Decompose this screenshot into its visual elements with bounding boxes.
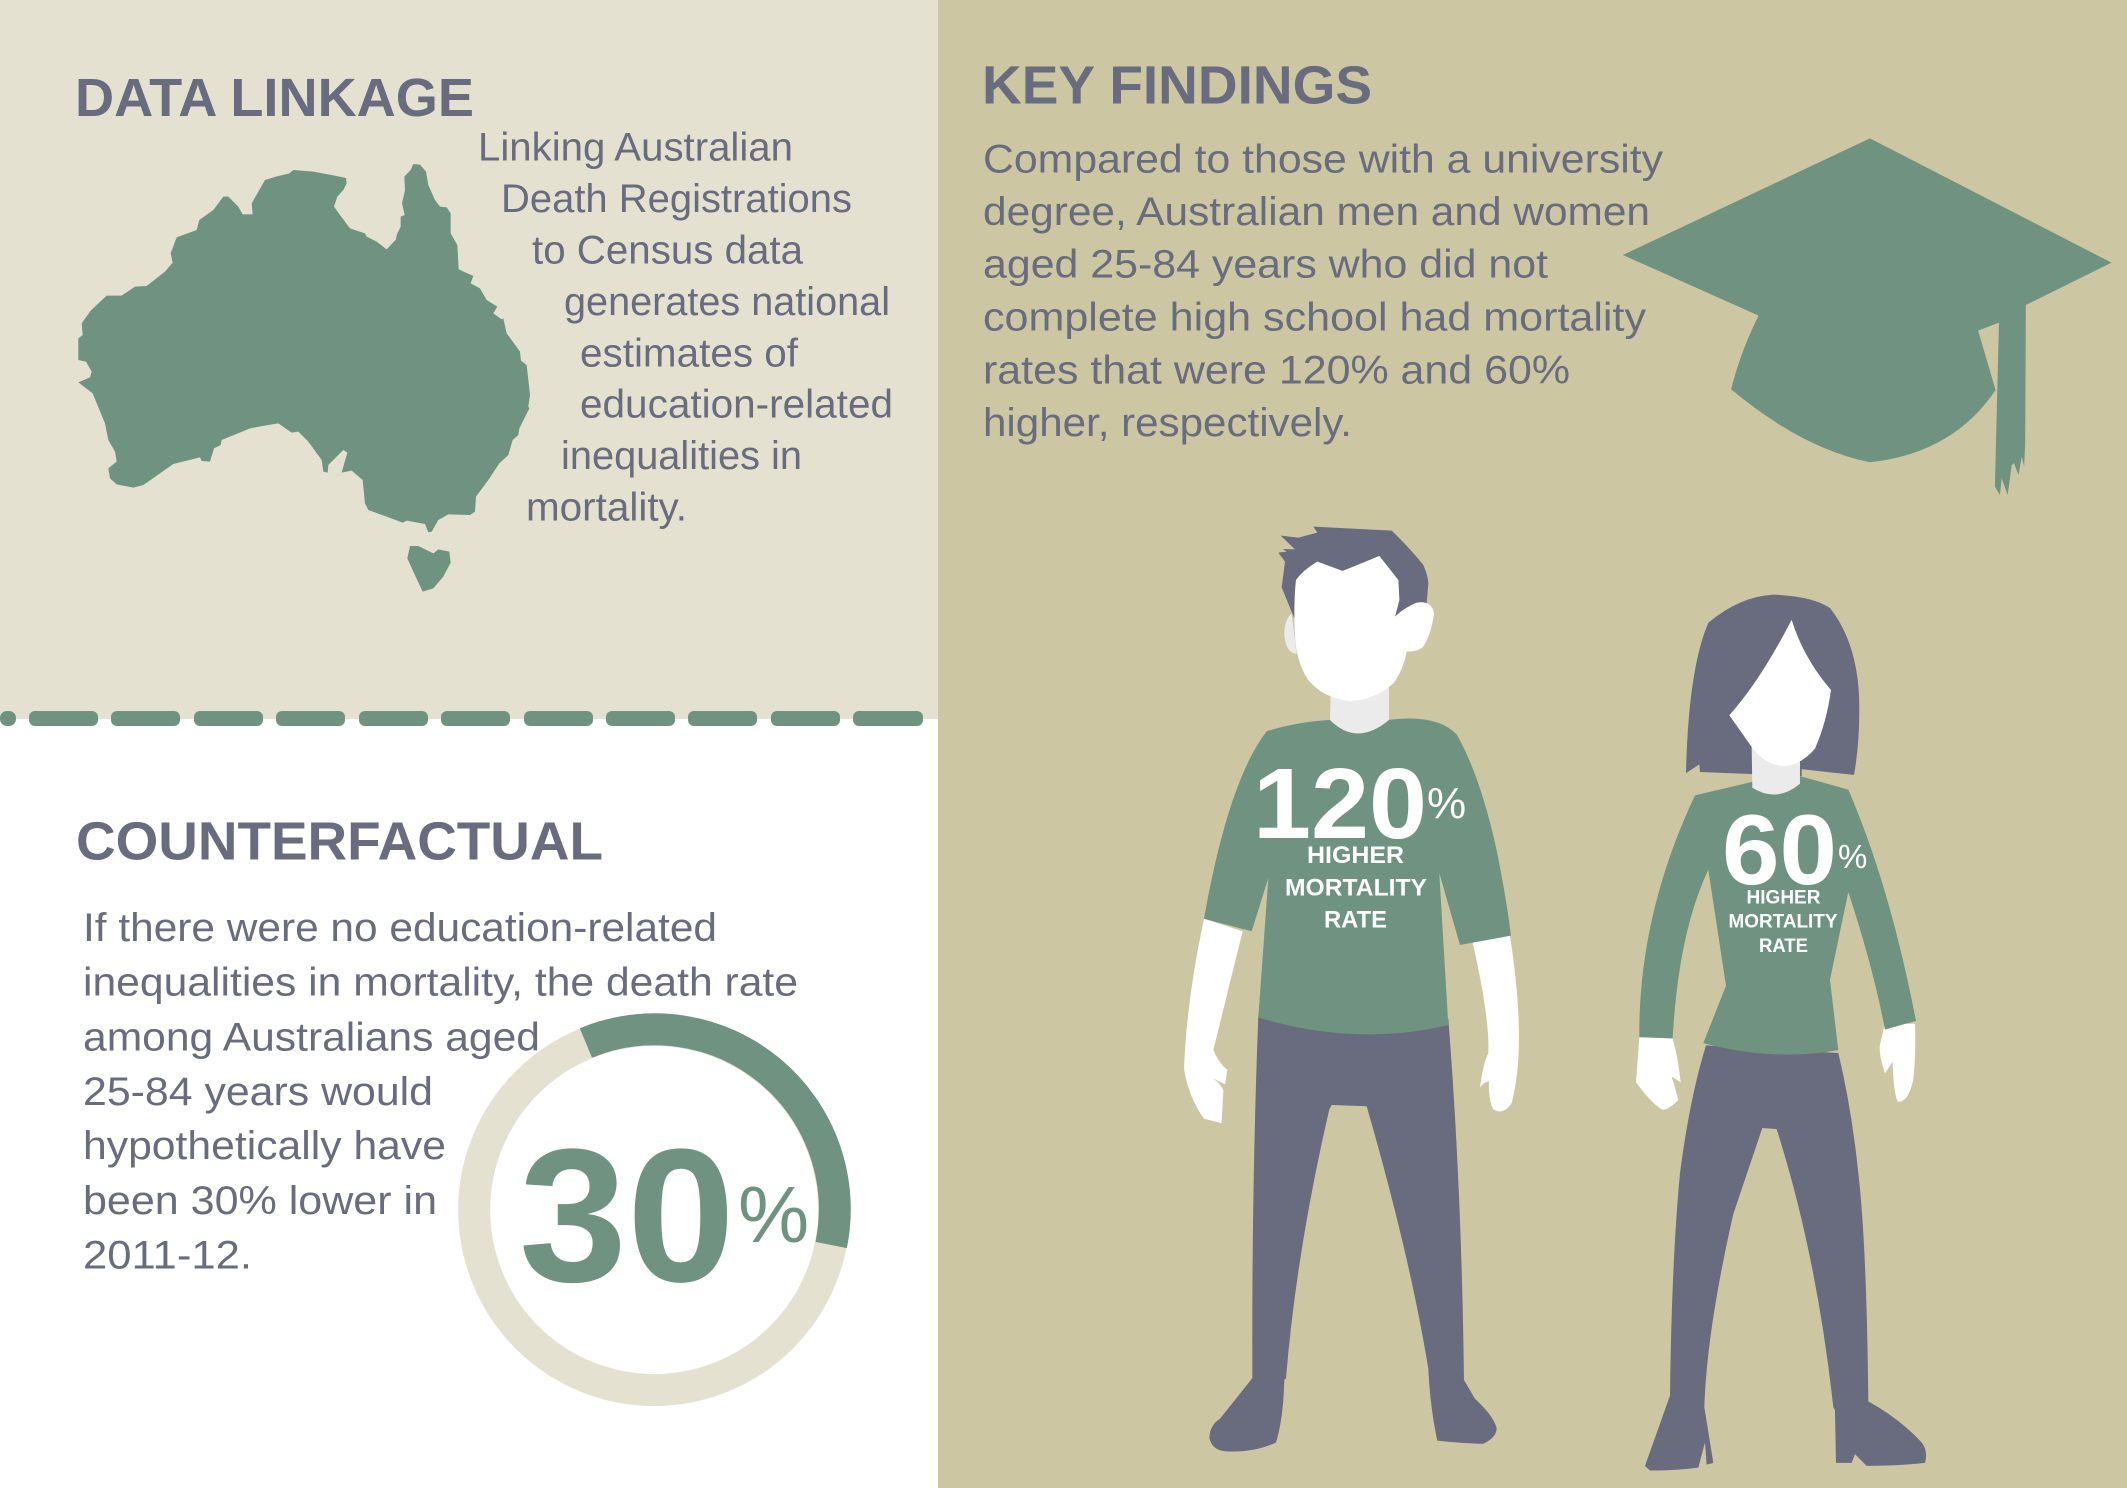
- man shirt text: HIGHER: [1307, 842, 1404, 869]
- text block: counterfactual description: among Australians aged: [83, 1016, 540, 1060]
- text block: counterfactual description: [83, 906, 798, 1278]
- woman hair: [1686, 595, 1859, 776]
- man shirt text: RATE: [1324, 906, 1387, 933]
- text block: data linkage description: Death Registrations: [501, 177, 852, 221]
- text block: counterfactual description: 2011-12.: [83, 1234, 252, 1278]
- text block: key findings description: aged 25-84 years who did not: [983, 243, 1548, 287]
- panel: data linkage: [0, 0, 938, 719]
- text block: key findings description: Compared to those with a university: [983, 137, 1663, 181]
- text block: data linkage description: inequalities in: [561, 434, 802, 478]
- woman shirt text: MORTALITY: [1728, 911, 1838, 932]
- woman top: [1639, 776, 1916, 1055]
- man arms: [1184, 919, 1519, 1123]
- man trousers: [1209, 1016, 1497, 1452]
- woman shirt text: HIGHER: [1746, 888, 1821, 909]
- man head: [1294, 556, 1434, 701]
- text block: counterfactual description: If there were no education-related: [83, 906, 717, 950]
- man shirt text: 120: [1253, 748, 1427, 860]
- woman hands: [1636, 1024, 1915, 1110]
- dashed divider: [0, 711, 923, 726]
- icon: graduation cap: [1623, 138, 2112, 495]
- text block: key findings description: complete high school had mortality: [983, 296, 1646, 340]
- text block: data linkage description: generates national: [564, 280, 890, 324]
- text block: key findings description: degree, Australian men and women: [983, 190, 1650, 234]
- woman shirt text: [1722, 794, 1867, 957]
- man t-shirt: [1204, 719, 1511, 1034]
- text block: counterfactual description: been 30% lower in: [83, 1179, 437, 1223]
- woman shirt text: RATE: [1759, 936, 1808, 957]
- man shirt text: [1253, 748, 1466, 933]
- text block: key findings description: higher, respectively.: [983, 401, 1352, 445]
- man shirt text: %: [1427, 779, 1466, 828]
- chart: 30% ring: [474, 1029, 835, 1390]
- man shirt text: MORTALITY: [1285, 875, 1427, 902]
- woman neck: [1752, 746, 1800, 795]
- heading: data linkage: DATA LINKAGE: [75, 68, 474, 128]
- text block: data linkage description: estimates of: [580, 331, 799, 375]
- woman trousers: [1645, 1045, 1926, 1470]
- text block: key findings description: rates that were 120% and 60%: [983, 348, 1570, 392]
- ring value: 30: [519, 1110, 735, 1322]
- text block: counterfactual description: 25-84 years would: [83, 1070, 433, 1114]
- woman shirt text: %: [1838, 838, 1867, 875]
- text block: data linkage description: [478, 126, 893, 530]
- man ear: [1284, 613, 1297, 654]
- panel: counterfactual: [76, 812, 835, 1390]
- woman face: [1729, 620, 1831, 766]
- figure: woman: [1636, 595, 1926, 1470]
- heading: counterfactual: COUNTERFACTUAL: [76, 812, 603, 872]
- figure: man: [1184, 527, 1519, 1452]
- text block: data linkage description: education-related: [580, 382, 893, 426]
- text block: data linkage description: Linking Australian: [478, 126, 793, 170]
- text block: data linkage description: mortality.: [526, 486, 687, 530]
- panel: key findings: [938, 0, 2127, 1488]
- text block: data linkage description: to Census data: [532, 228, 804, 272]
- man neck: [1330, 681, 1389, 733]
- heading: key findings: KEY FINDINGS: [982, 56, 1372, 116]
- ring percent sign: %: [738, 1170, 809, 1259]
- text block: key findings description: [983, 137, 1663, 445]
- man hair: [1278, 527, 1428, 618]
- woman shirt text: 60: [1722, 794, 1837, 905]
- icon: map of Australia: [78, 164, 530, 592]
- text block: counterfactual description: inequalities in mortality, the death rate: [83, 960, 798, 1004]
- text block: counterfactual description: hypothetically have: [83, 1124, 446, 1168]
